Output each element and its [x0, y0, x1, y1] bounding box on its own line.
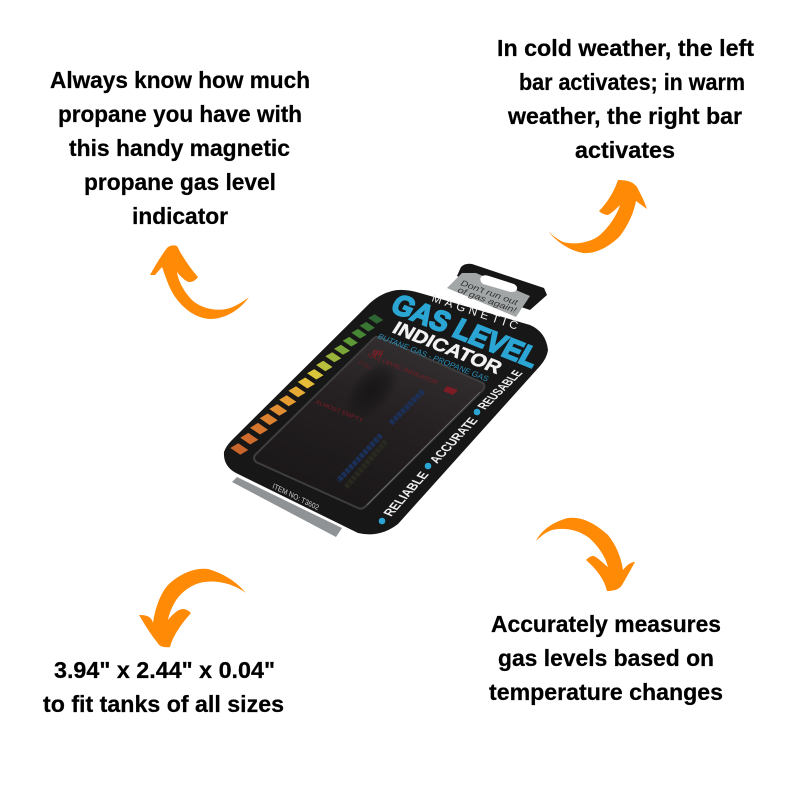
window labels: FULL [357, 361, 373, 371]
text block: accurately measures: temperature changes [489, 679, 723, 705]
colour scale [230, 314, 383, 455]
product: gas level indicator card [224, 264, 548, 537]
title: magnetic: MAGNETIC [430, 292, 520, 333]
card backing grey strip [232, 477, 342, 537]
window labels [314, 346, 458, 424]
text block: cold and warm weather bars: bar activates; in warm [519, 69, 745, 95]
label: reliable accurate reusable: RELIABLE [380, 470, 432, 518]
text block: cold and warm weather bars [497, 35, 754, 163]
text block: always know propane [50, 67, 310, 229]
arrow: bottom left, pointing down [139, 569, 246, 647]
text block: cold and warm weather bars: In cold weather, the left [497, 35, 754, 61]
black card body [224, 290, 548, 534]
label: reliable accurate reusable: ACCURATE [426, 416, 481, 465]
text block: accurately measures: gas levels based on [498, 645, 714, 671]
hanger slogan: Don't run out [459, 278, 520, 307]
hanger slogan: of gas again! [456, 285, 519, 315]
label: reliable accurate reusable: REUSABLE [474, 368, 526, 411]
item number: ITEM NO: T3602 [271, 482, 320, 512]
subtitle: butane propane: BUTANE GAS - PROPANE GAS [376, 332, 491, 383]
text block: always know propane: propane you have with [58, 101, 302, 127]
window labels: GAS LEVEL INDICATOR [366, 352, 440, 387]
green temperature bar [346, 441, 386, 487]
text block: dimensions: to fit tanks of all sizes [43, 691, 284, 717]
title: gas level: GAS LEVEL [386, 288, 545, 374]
text block: dimensions: 3.94" x 2.44" x 0.04" [54, 657, 275, 683]
blue temperature bar [338, 391, 423, 481]
hanger slogan [456, 278, 520, 315]
text block: always know propane: indicator [132, 203, 228, 229]
arrow: top right, pointing up [548, 180, 647, 253]
text block: always know propane: this handy magnetic [69, 135, 290, 161]
label: reliable accurate reusable [379, 368, 526, 524]
title: indicator: INDICATOR [388, 318, 506, 378]
text block: accurately measures: Accurately measures [491, 611, 721, 637]
text block: accurately measures [489, 611, 723, 705]
arrow: bottom right, pointing down [536, 518, 635, 591]
text block: always know propane: propane gas level [84, 169, 276, 195]
window labels: ALMOST EMPTY [314, 399, 364, 424]
hanger tab [447, 264, 547, 317]
text block: cold and warm weather bars: weather, the right bar [507, 103, 742, 129]
window labels: gli [371, 346, 385, 359]
arrow: top left, pointing up [150, 245, 249, 319]
indicator window [254, 337, 484, 509]
text block: cold and warm weather bars: activates [575, 137, 675, 163]
text block: dimensions [43, 657, 284, 717]
text block: always know propane: Always know how much [50, 67, 310, 93]
